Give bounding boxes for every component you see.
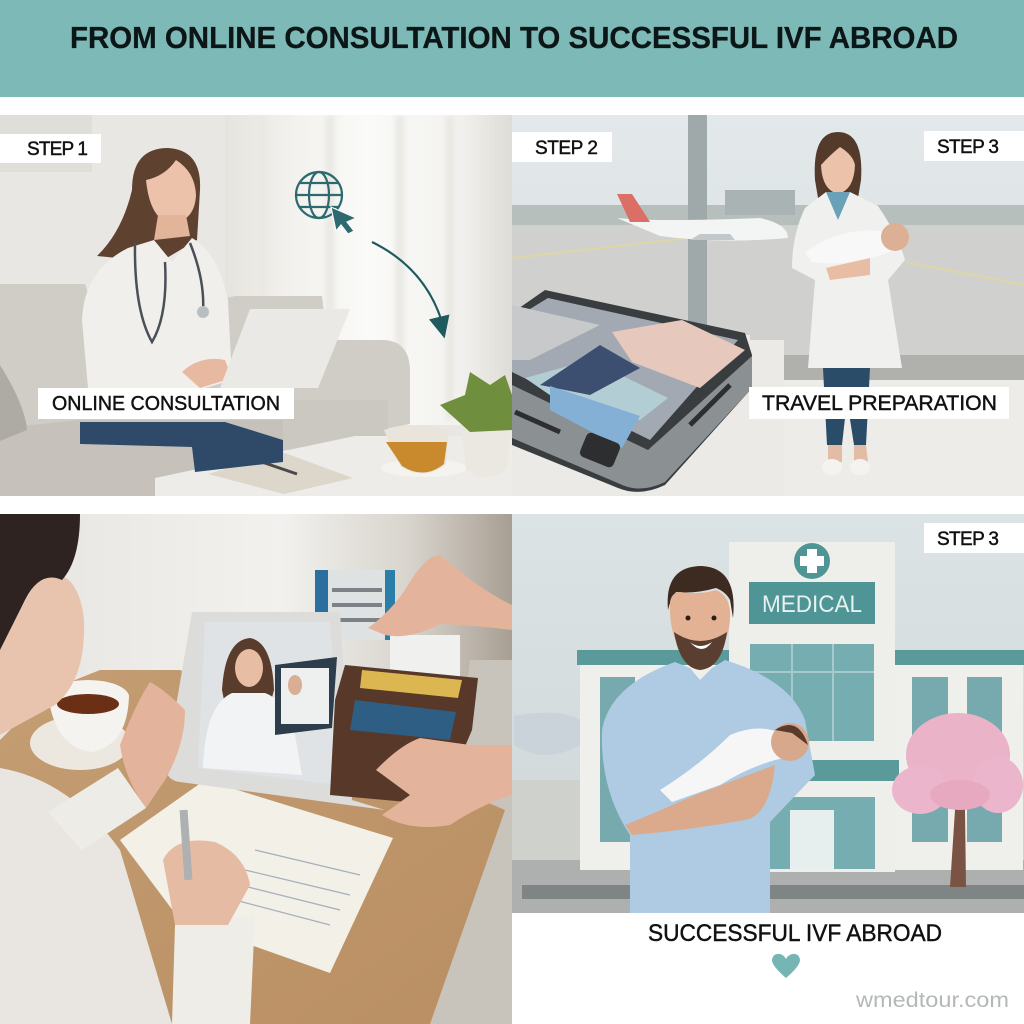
plant and tea (381, 372, 512, 477)
step 3 label (924, 131, 1024, 161)
cherry tree (892, 713, 1023, 887)
medical sign: MEDICAL (762, 591, 862, 618)
person over-shoulder (0, 514, 255, 1024)
panel: successful IVF abroad (512, 514, 1024, 1024)
coffee table (155, 436, 388, 496)
man holding baby (602, 566, 815, 913)
hands (120, 555, 512, 827)
doctor holding baby (792, 132, 909, 475)
airplane (514, 713, 580, 755)
suitcase (512, 290, 752, 492)
white caption strip (512, 913, 1024, 1024)
tablet (166, 612, 385, 810)
panel: online consultation (0, 115, 512, 496)
label: travel preparation (749, 387, 1009, 419)
step 2 label (512, 132, 612, 162)
notebook (120, 780, 393, 973)
title banner: FROM ONLINE CONSULTATION TO SUCCESSFUL IVF ABROAD (70, 20, 958, 55)
icon: globe and cursor (296, 172, 356, 234)
label: travel preparation: TRAVEL PREPARATION (762, 392, 997, 415)
sofa (0, 284, 410, 496)
icon: medical cross (794, 543, 830, 579)
tea cup (30, 680, 130, 770)
step 3 label bottom (924, 523, 1024, 553)
step 2 label: STEP 2 (535, 138, 598, 159)
step 1 label (0, 134, 101, 163)
panel: tablet and documents (0, 514, 512, 1024)
medical sign (749, 582, 875, 624)
step 1 label: STEP 1 (27, 139, 88, 160)
label: online consultation (38, 388, 294, 419)
title banner (0, 0, 1024, 97)
icon: heart (772, 954, 800, 978)
step 3 label: STEP 3 (937, 137, 999, 158)
arrow (372, 242, 448, 336)
panel: travel preparation (512, 115, 1024, 496)
step 3 label bottom: STEP 3 (937, 529, 999, 550)
hospital building (522, 542, 1024, 899)
boarding pass (315, 570, 460, 680)
label: online consultation: ONLINE CONSULTATION (52, 393, 280, 415)
wallet (330, 665, 478, 805)
airplane (617, 194, 788, 241)
caption: SUCCESSFUL IVF ABROAD (648, 920, 942, 947)
doctor with laptop (80, 148, 350, 472)
table surface (512, 335, 784, 496)
watermark: wmedtour.com (855, 989, 1009, 1012)
